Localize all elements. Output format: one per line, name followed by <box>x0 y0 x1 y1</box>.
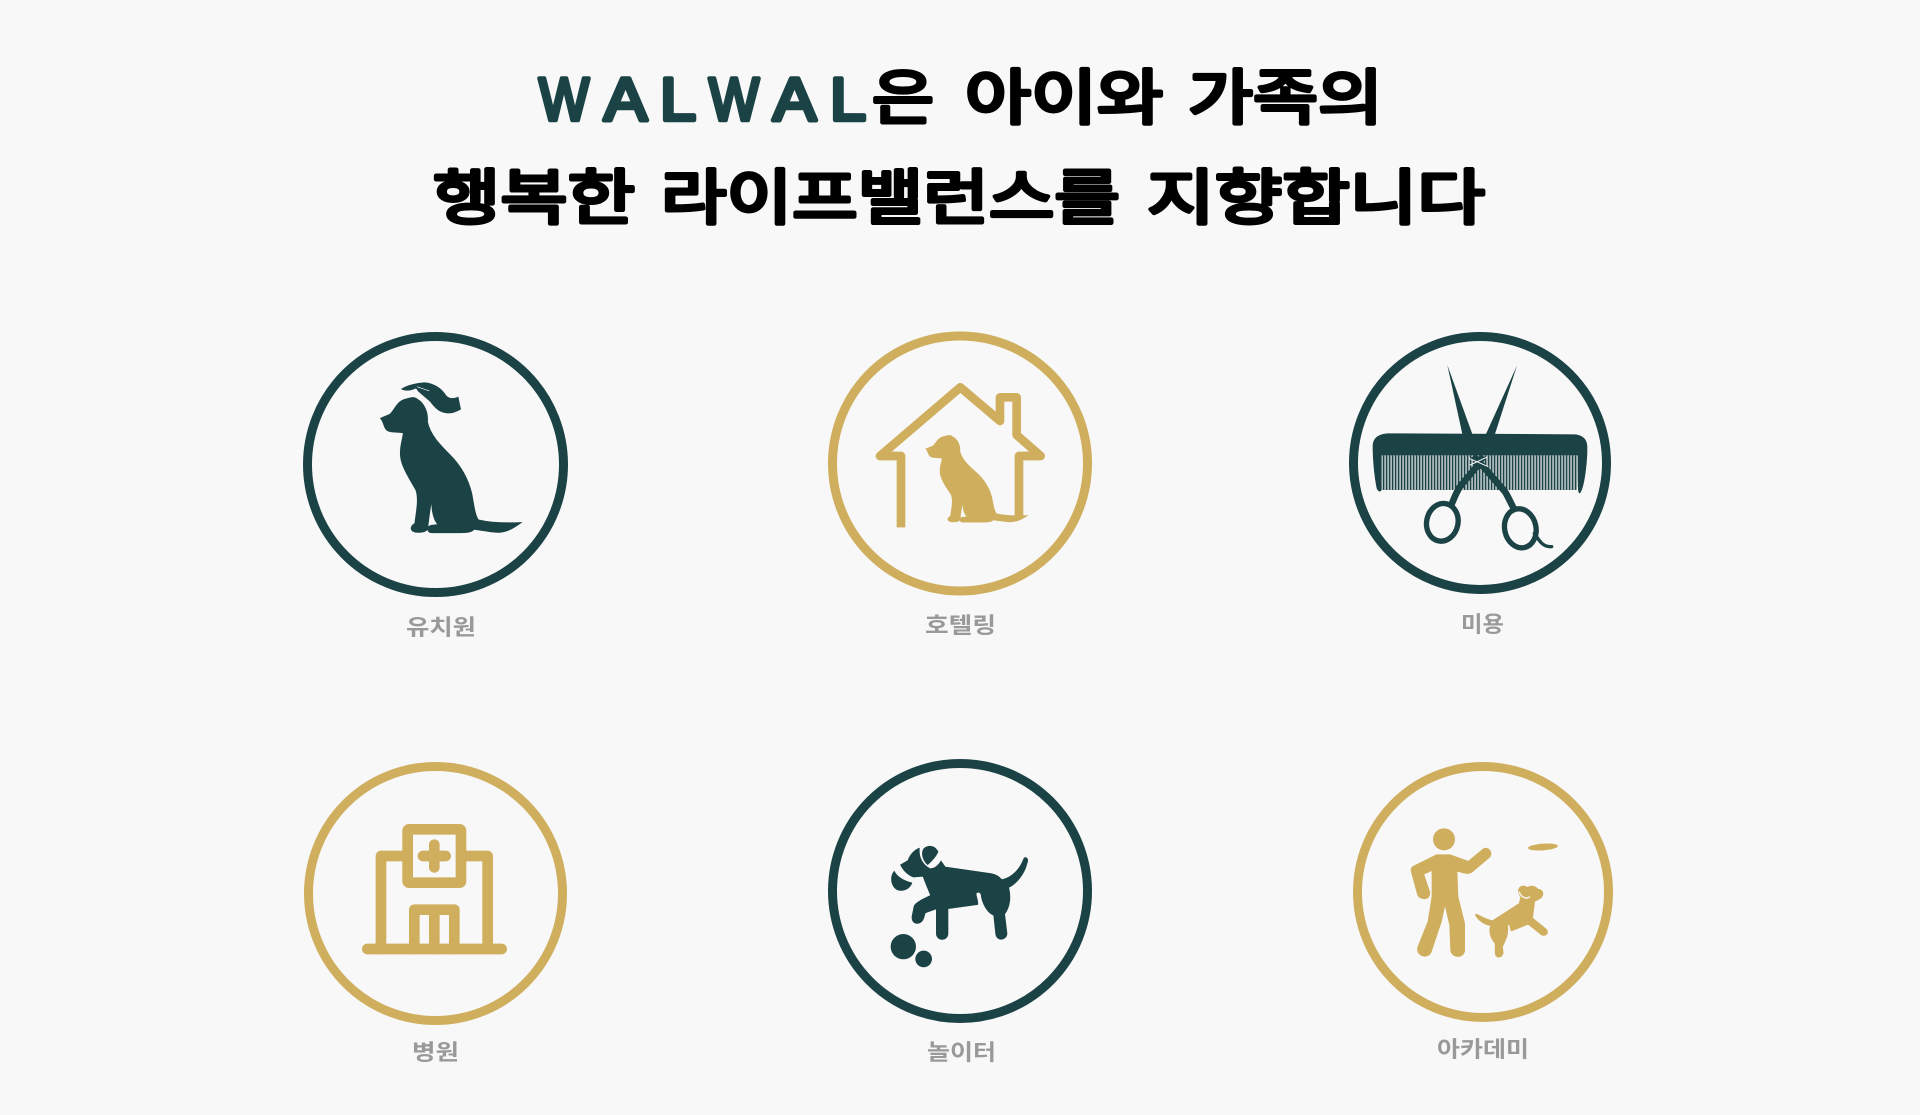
panel: kindergarten <box>308 336 564 640</box>
brand name: W <box>709 66 759 133</box>
icon: dog with balls <box>891 846 1027 967</box>
title <box>433 65 1485 232</box>
brand name: A <box>604 66 647 133</box>
brand name: A <box>773 66 816 133</box>
panel: hospital <box>308 766 562 1065</box>
title line 2 <box>433 165 1485 232</box>
ring <box>1354 336 1606 590</box>
title line 1: 은 <box>872 65 934 132</box>
brand name: W <box>539 66 589 133</box>
label: 호텔링 <box>925 613 996 638</box>
title line 2: 행복한 <box>433 165 635 232</box>
panel: academy <box>1358 766 1608 1062</box>
label: 놀이터 <box>927 1040 996 1065</box>
icon: hospital building <box>367 829 502 949</box>
label: 아카데미 <box>1437 1037 1529 1062</box>
panel: hotel <box>832 336 1088 638</box>
ring <box>308 766 562 1020</box>
label: 병원 <box>412 1040 459 1065</box>
ring <box>308 336 564 592</box>
panel: grooming <box>1354 336 1606 637</box>
icon: house with dog <box>880 387 1041 527</box>
title line 1: 가족의 <box>1188 65 1383 132</box>
ring <box>832 764 1088 1018</box>
brand name <box>539 66 866 133</box>
panel: playground <box>832 764 1088 1065</box>
ring <box>1358 766 1608 1018</box>
icon: person and dog with frisbee <box>1411 828 1558 956</box>
ring <box>832 336 1088 591</box>
brand name: L <box>830 66 866 133</box>
icon: comb and scissors <box>1373 365 1587 551</box>
title line 2: 지향합니다 <box>1147 165 1485 232</box>
brand name: L <box>660 66 696 133</box>
icon: dog with hand <box>381 382 521 533</box>
label: 미용 <box>1461 612 1504 637</box>
title line 1 <box>539 65 1383 133</box>
label: 유치원 <box>406 615 476 640</box>
title line 2: 라이프밸런스를 <box>661 165 1120 232</box>
title line 1: 아이와 <box>965 65 1163 132</box>
